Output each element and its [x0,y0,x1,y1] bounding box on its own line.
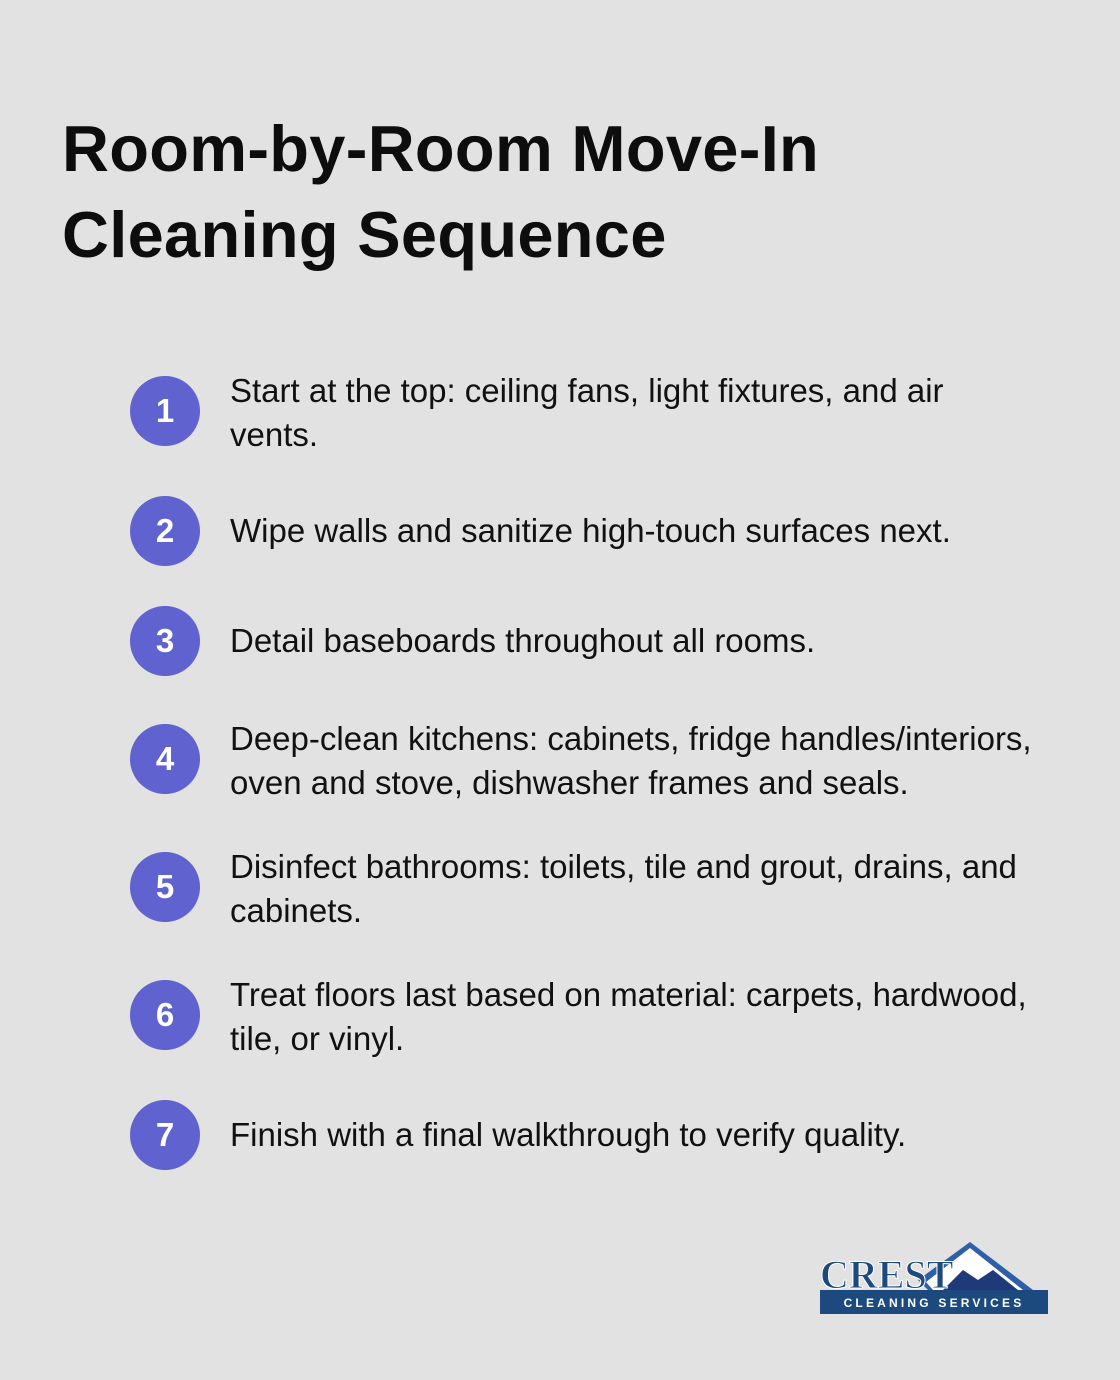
title [62,112,819,271]
step 3: Detail baseboards throughout all rooms. [230,622,815,659]
step 1 [130,372,944,453]
step 6 [130,976,1027,1057]
step 4: Deep-clean kitchens: cabinets, fridge handles/interiors, [230,720,1032,757]
title: Cleaning Sequence [62,198,667,271]
step 7 [130,1100,906,1170]
step 6: 6 [156,996,174,1033]
step 1: 1 [156,392,174,429]
logo: CLEANING SERVICES [844,1296,1024,1310]
step 5: cabinets. [230,892,362,929]
step 6: tile, or vinyl. [230,1020,404,1057]
step 1: Start at the top: ceiling fans, light fixtures, and air [230,372,944,409]
title: Room-by-Room Move-In [62,112,819,185]
step 4: oven and stove, dishwasher frames and seals. [230,764,909,801]
step 2: 2 [156,512,174,549]
step 7: Finish with a final walkthrough to verify quality. [230,1116,906,1153]
step 2 [130,496,951,566]
logo: CREST [820,1252,954,1297]
logo [820,1242,1048,1314]
step 5 [130,848,1017,929]
step 3 [130,606,815,676]
step 5: 5 [156,868,174,905]
step 2: Wipe walls and sanitize high-touch surfaces next. [230,512,951,549]
step 1: vents. [230,416,318,453]
step 4: 4 [156,740,174,777]
step 3: 3 [156,622,174,659]
step 4 [130,720,1032,801]
step 6: Treat floors last based on material: carpets, hardwood, [230,976,1027,1013]
step 5: Disinfect bathrooms: toilets, tile and grout, drains, and [230,848,1017,885]
step 7: 7 [156,1116,174,1153]
